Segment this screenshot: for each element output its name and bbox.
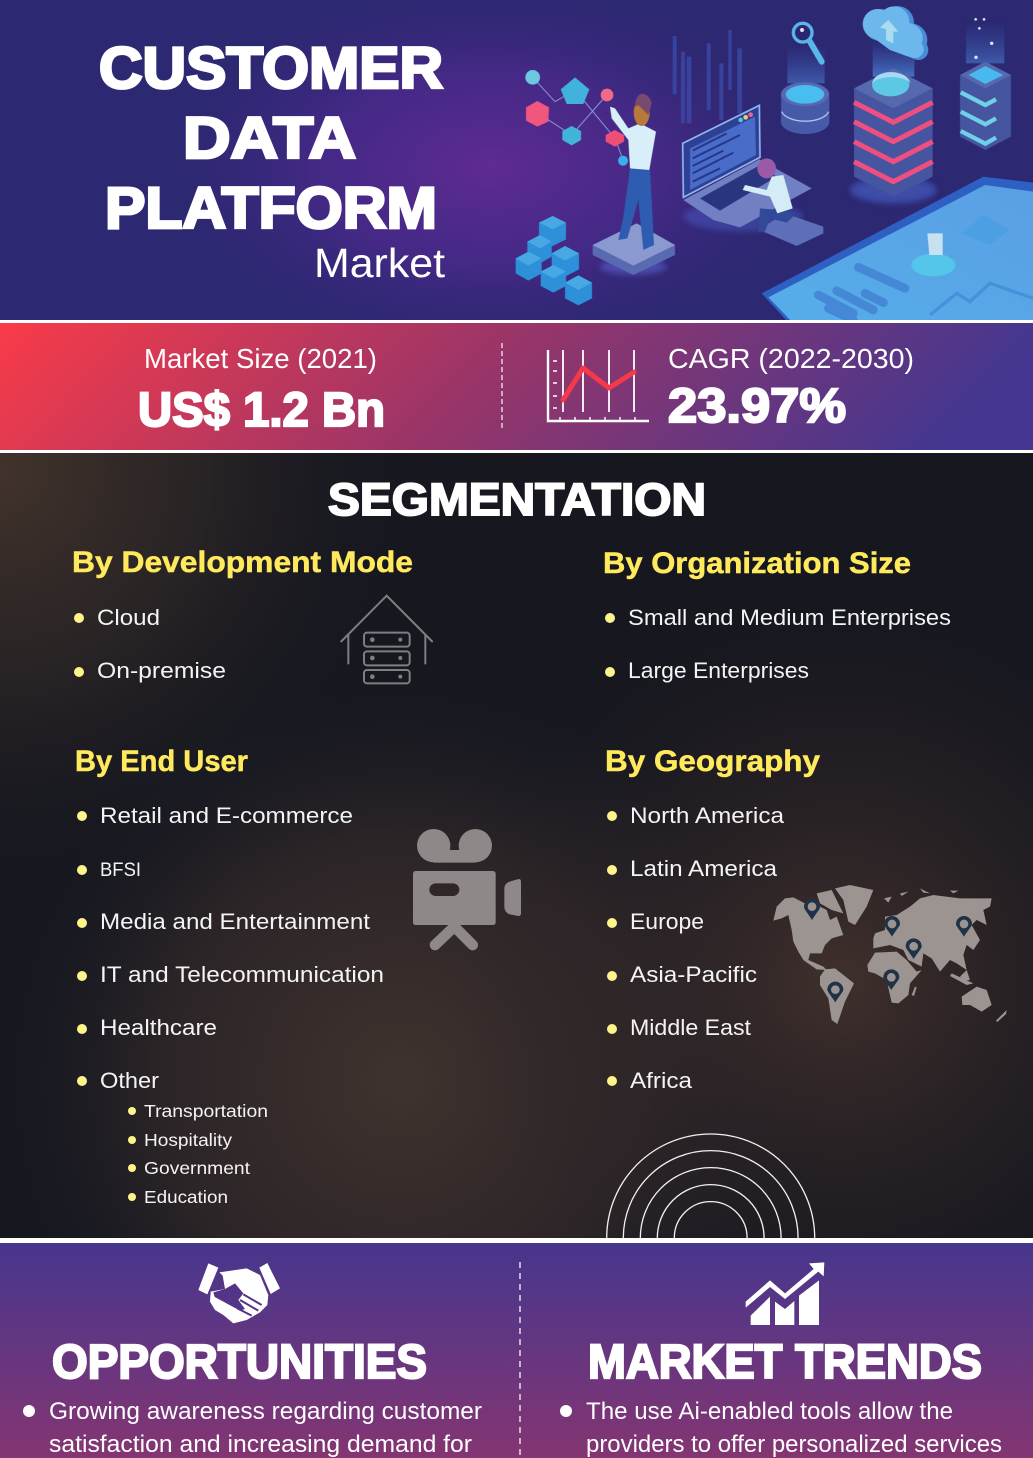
segment: by development mode: By Development Mode: [72, 546, 413, 579]
segment: by end user: Healthcare: [100, 1015, 217, 1040]
segment: by development mode: On-premise: [97, 658, 226, 683]
segment: by geography: Latin America: [630, 856, 778, 881]
segment: by geography: North America: [630, 803, 785, 828]
market trends: MARKET TRENDS: [588, 1336, 982, 1389]
segment: by end user: Other: [100, 1068, 159, 1093]
opportunities: satisfaction and increasing demand for: [49, 1431, 472, 1458]
segment: by geography: Europe: [630, 909, 704, 934]
segment: by geography: [605, 745, 820, 1093]
opportunities: Growing awareness regarding customer: [49, 1398, 482, 1425]
market size: [138, 343, 385, 437]
icon: laptop: [683, 105, 812, 232]
segment: by geography: Africa: [630, 1068, 693, 1093]
segment: by organization size: [603, 547, 951, 683]
opportunities: OPPORTUNITIES: [52, 1336, 427, 1389]
segment: by end user: Transportation: [144, 1101, 268, 1121]
title: DATA: [183, 106, 356, 171]
icon: stacked cubes: [516, 216, 592, 305]
segment: by end user: Government: [144, 1158, 250, 1178]
opportunities: [23, 1336, 482, 1458]
heading: SEGMENTATION: [328, 474, 706, 525]
icon: database cylinder: [781, 43, 829, 134]
panel: opportunities and market trends: [0, 1243, 1033, 1458]
segment: by end user: Education: [144, 1187, 228, 1207]
icon: world map with pins: [773, 885, 1007, 1024]
segment: by end user: Hospitality: [144, 1130, 232, 1150]
icon: seated person: [743, 158, 823, 246]
segment: by end user: BFSI: [100, 860, 141, 881]
segment: by organization size: By Organization Size: [603, 547, 911, 580]
segment: by end user: IT and Telecommunication: [100, 962, 384, 987]
CAGR: CAGR (2022-2030): [668, 343, 914, 374]
icon: handshake: [198, 1263, 280, 1323]
segment: by end user: By End User: [75, 745, 248, 778]
stats band: [0, 323, 1033, 450]
icon: large server stack: [850, 38, 937, 203]
segment: by organization size: Small and Medium Enterprises: [628, 605, 951, 630]
segment: by geography: Middle East: [630, 1015, 751, 1040]
icon: standing person on platform: [593, 94, 675, 275]
icon: rising chart: [746, 1262, 824, 1325]
title: Market: [314, 240, 446, 286]
icon: tablet dashboard: [762, 177, 1033, 325]
segment: by end user: Media and Entertainment: [100, 909, 370, 934]
market trends: providers to offer personalized services: [586, 1431, 1002, 1458]
title: PLATFORM: [105, 176, 437, 241]
illustration: isometric data platform scene: [516, 6, 1033, 325]
market trends: [560, 1336, 1002, 1458]
panel: segmentation: [0, 453, 1033, 1238]
segment: by end user: [75, 745, 384, 1207]
CAGR: 23.97%: [668, 380, 846, 433]
icon: on-premise server house: [341, 596, 433, 683]
header panel: [0, 0, 1033, 325]
market size: Market Size (2021): [144, 343, 377, 374]
icon: video camera: [413, 829, 521, 945]
icon: molecule network: [525, 70, 628, 166]
segment: by development mode: Cloud: [97, 605, 160, 630]
segment: by geography: Asia-Pacific: [630, 962, 757, 987]
icon: CAGR line chart: [548, 350, 649, 421]
icon: magnifier: [793, 23, 822, 62]
title: [99, 36, 446, 286]
market trends: The use Ai-enabled tools allow the: [586, 1398, 953, 1425]
decorative concentric arcs: [607, 1134, 815, 1238]
segment: by organization size: Large Enterprises: [628, 658, 809, 683]
CAGR: [668, 343, 914, 433]
icon: cloud upload: [863, 6, 928, 60]
market size: US$ 1.2 Bn: [138, 384, 385, 437]
segment: by geography: By Geography: [605, 745, 820, 778]
icon: small server: [960, 18, 1011, 150]
title: CUSTOMER: [99, 36, 443, 101]
segment: by end user: Retail and E-commerce: [100, 803, 353, 828]
icon: code bars: [673, 30, 742, 123]
segment: by development mode: [72, 546, 413, 683]
